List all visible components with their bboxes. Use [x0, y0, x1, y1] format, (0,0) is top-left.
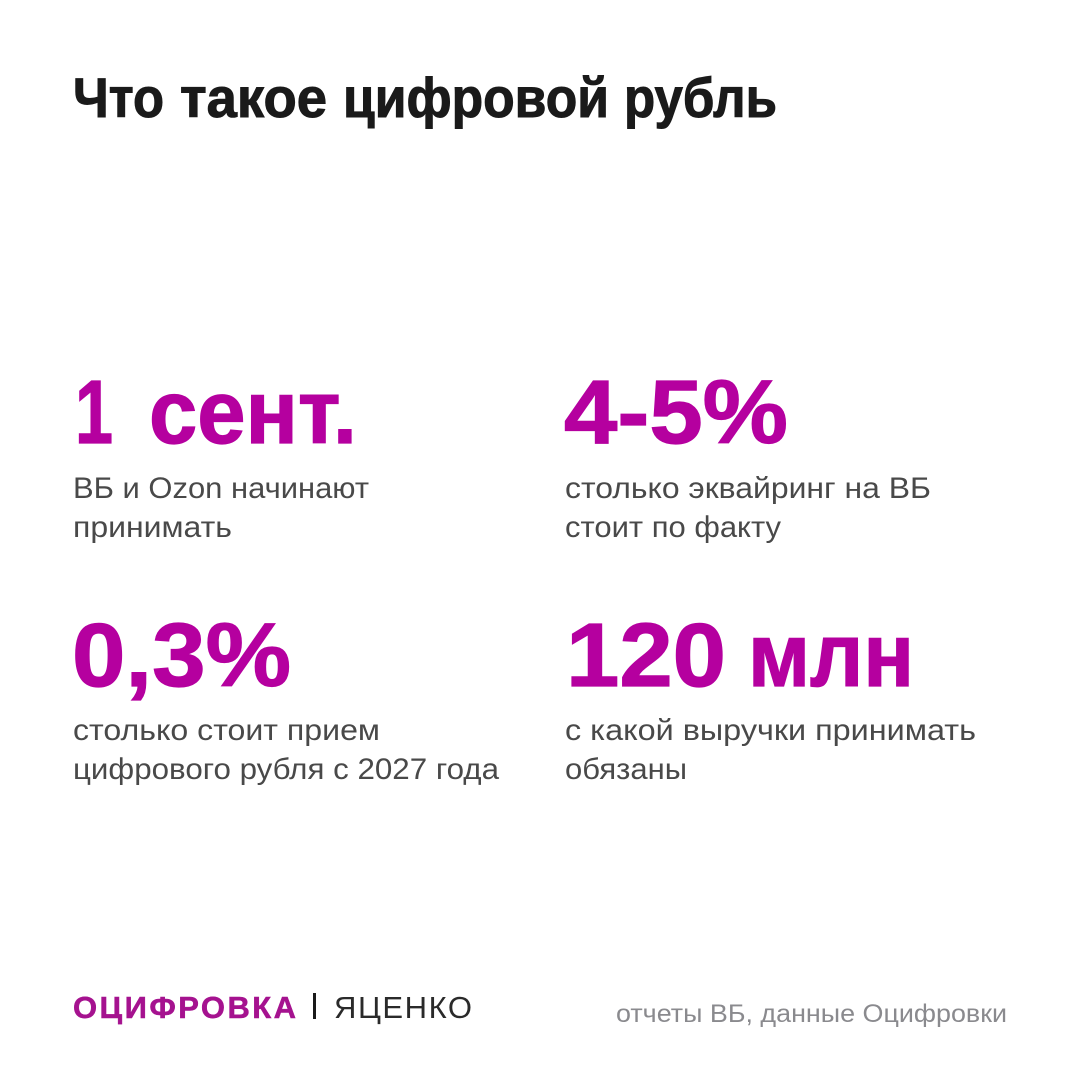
- panel: 120 млн: [565, 606, 976, 786]
- stat description: ВБ и Ozon: ВБ и Ozon начинают: [73, 472, 369, 505]
- logo: ОЦИФРОВКА: ОЦИФРОВКА: [73, 990, 296, 1025]
- panel: 1 сент.: [73, 363, 369, 544]
- stat number: 4-5%: 4-5%: [564, 363, 788, 463]
- logo: ЯЦЕНКО: ЯЦЕНКО: [334, 990, 472, 1025]
- footer logo: [73, 990, 472, 1025]
- stat description: эквайринг: стоит по факту: [565, 511, 781, 544]
- stat description: выручка: с какой выручки принимать: [565, 714, 976, 747]
- stat number: 120 млн: млн: [748, 606, 914, 706]
- title: цифровой: [343, 66, 609, 129]
- stat number: 120 млн: 120: [566, 606, 726, 706]
- title: Что: [73, 66, 164, 129]
- panel: 4-5%: [564, 363, 931, 544]
- logo divider: [313, 993, 316, 1019]
- stat description: прием цифрового рубля: столько стоит прием: [73, 714, 380, 747]
- stat number: 120 млн: [566, 606, 914, 706]
- stat description: ВБ и Ozon: принимать: [73, 511, 232, 544]
- stat description: выручка: обязаны: [565, 753, 687, 786]
- title: рубль: [624, 66, 777, 129]
- stat description: эквайринг: [565, 472, 931, 544]
- stat description: эквайринг: столько эквайринг на ВБ: [565, 472, 931, 505]
- source note: отчеты ВБ, данные Оцифровки: [616, 1000, 1007, 1028]
- stat number: 1 сент.: сент.: [149, 363, 357, 463]
- stat description: ВБ и Ozon: [73, 472, 369, 544]
- stat description: прием цифрового рубля: цифрового рубля с 2027 года: [73, 753, 499, 786]
- stat description: выручка: [565, 714, 976, 786]
- title: [73, 66, 777, 129]
- stat description: прием цифрового рубля: [73, 714, 499, 786]
- stat number: 1 сент.: 1: [75, 363, 113, 463]
- panel: 0,3%: [72, 606, 499, 786]
- title: такое: [180, 66, 327, 129]
- stat number: 0,3%: 0,3%: [72, 606, 291, 706]
